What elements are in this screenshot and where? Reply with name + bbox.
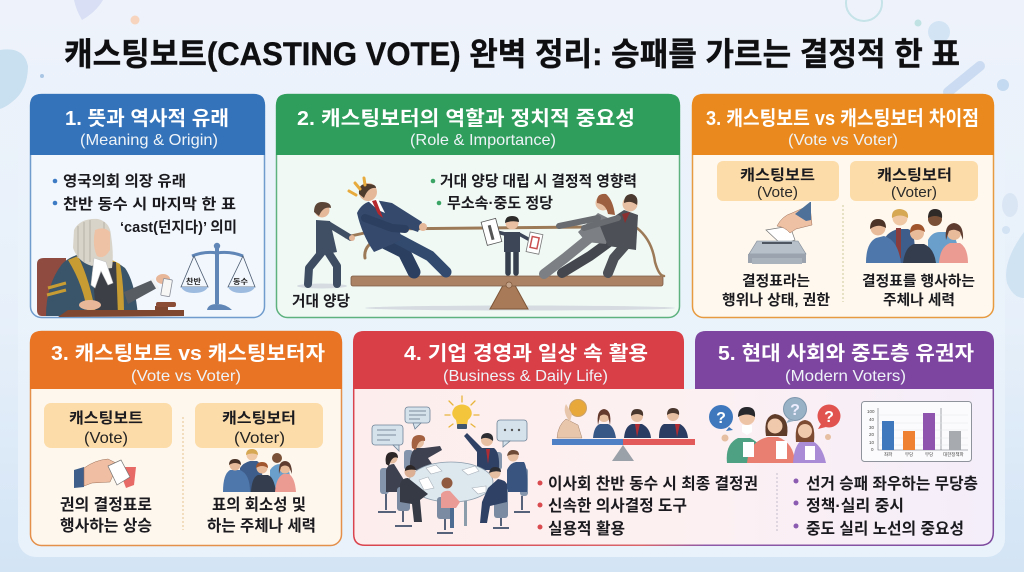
panel 4 bullets: 신속한 의사결정 도구 [548,497,687,515]
panel: 3. vote vs voter differences [692,94,994,318]
top-left woman [410,446,442,470]
panel 3 header: 3. 캐스팅보트 vs 캐스팅보터 차이점 [706,107,979,130]
label: big parties: 거대 양당 [292,293,350,310]
voter description: 주체나 세력 [883,292,955,309]
icon: tug of war on seesaw [297,178,675,310]
voter label box: 캐스팅보터 [222,410,296,427]
far left woman [386,464,404,492]
panel 4 bullets [538,475,758,538]
voter label box: (Voter) [891,184,937,201]
icon: balance scale: 동수 [233,277,248,286]
front right man [494,488,508,518]
chart: voter bar chart: 10 [869,440,875,445]
icon: balance scale [181,243,255,310]
icon: balance scale: 찬반 [186,276,201,286]
panel 5 header: (Modern Voters) [785,368,906,385]
back chairs [380,450,528,496]
icon: undecided voters with question marks: ? [716,410,726,427]
icon: undecided voters with question marks [709,398,840,463]
far right man [507,462,527,492]
voter description [862,273,975,309]
panel 5 bullets: 선거 승패 좌우하는 무당층 [806,475,978,493]
panel 5 bullets: 중도 실리 노선의 중요성 [806,520,964,538]
voter description: 하는 주체나 세력 [207,517,316,535]
panel 1 header [30,94,265,155]
chart: voter bar chart: 대한정책파 [943,451,965,458]
chart: voter bar chart: 0 [871,447,874,452]
panel 2 bullets: 무소속·중도 정당 [447,195,553,212]
panel 1 header: (Meaning & Origin) [80,132,218,149]
icon: lightbulb [445,396,479,429]
chart: voter bar chart [862,402,972,462]
panel 3b header [30,331,342,389]
chart: voter bar chart: 좌파 [884,451,893,458]
chart: voter bar chart: 30 [869,425,875,430]
vote description [722,273,830,309]
panel 3 header [692,94,994,155]
panel: 3b. vote vs voter [30,331,342,546]
chart: voter bar chart: 100 [867,409,875,414]
chart: voter bar chart: 40 [869,417,875,422]
panel 2 header: 2. 캐스팅보터의 역할과 정치적 중요성 [297,107,635,130]
table [464,496,467,526]
panel 3 header: (Vote vs Voter) [788,132,898,149]
panel 2 header: (Role & Importance) [410,132,556,149]
voter description [207,496,316,535]
voter label box: 캐스팅보터 [877,167,952,184]
icon: judge in wig casting a vote [37,219,184,317]
icon: boardroom meeting [372,407,530,533]
panel 2 bullets [431,173,637,212]
icon: group of voters [866,209,968,263]
vote description: 결정표라는 [742,273,810,290]
panel 4 header: 4. 기업 경영과 일상 속 활용 [404,342,648,365]
vote description [60,496,152,535]
icon: undecided voters with question marks: ? [790,402,800,419]
panel 2 bullets: 거대 양당 대립 시 결정적 영향력 [440,173,637,190]
panel 5 header [695,331,994,389]
icon: group of voters [223,449,296,492]
vote label box: 캐스팅보트 [69,410,143,427]
icon: ballot box and hand [748,202,812,264]
chart: voter bar chart: 무당 [905,451,913,458]
top-right man [464,433,499,470]
icon: undecided voters with question marks: ? [824,409,834,426]
vote label box: (Vote) [757,184,798,201]
panel 5 bullets: 정책·실리 중시 [806,497,904,515]
voter description: 결정표를 행사하는 [862,273,975,290]
panel 3b header: (Vote vs Voter) [131,368,241,385]
voter label box [195,403,323,448]
icon: balance with coin and board [552,400,695,461]
panel 1 bullets: 영국의회 의장 유래 [63,173,186,190]
panel 4 header: (Business & Daily Life) [443,368,608,385]
vote label box: (Vote) [84,430,128,447]
panel 4 header [353,331,684,389]
chart: voter bar chart: 20 [869,432,875,437]
vote label box [717,161,839,201]
panel 1 bullets: ‘cast(던지다)’ 의미 [120,219,237,236]
panel 4 bullets: 실용적 활용 [548,520,625,538]
title: 캐스팅보트(CASTING VOTE) 완벽 정리: 승패를 가르는 결정적 한 표 [64,36,960,72]
front left man [397,487,410,511]
panel 1 bullets: 찬반 동수 시 마지막 한 표 [63,196,236,213]
panel 3b header: 3. 캐스팅보트 vs 캐스팅보터자 [51,342,325,365]
panel 5 header: 5. 현대 사회와 중도층 유권자 [718,342,974,365]
vote description: 행사하는 상승 [60,516,152,535]
vote label box: 캐스팅보트 [740,167,815,184]
icon: hand holding ballot [74,459,136,488]
panel 4 bullets: 이사회 찬반 동수 시 최종 결정권 [548,475,758,493]
panel 1 bullets [53,173,237,236]
panel 1 header: 1. 뜻과 역사적 유래 [65,107,229,130]
front center woman [437,497,453,519]
chart: voter bar chart: 무당 [925,451,933,458]
panel: 4 and 5 shared body [353,331,994,546]
vote label box [44,403,172,448]
panel 2 header [276,94,680,155]
panel: 1. meaning and origin [30,94,265,318]
panel 5 bullets [794,475,978,538]
vote description: 권의 결정표로 [60,496,152,514]
vote description: 행위나 상태, 권한 [722,292,830,309]
voter label box [850,161,978,201]
voter description: 표의 회소성 및 [212,496,306,514]
voter label box: (Voter) [234,430,285,447]
panel: 2. role and importance [276,94,680,318]
